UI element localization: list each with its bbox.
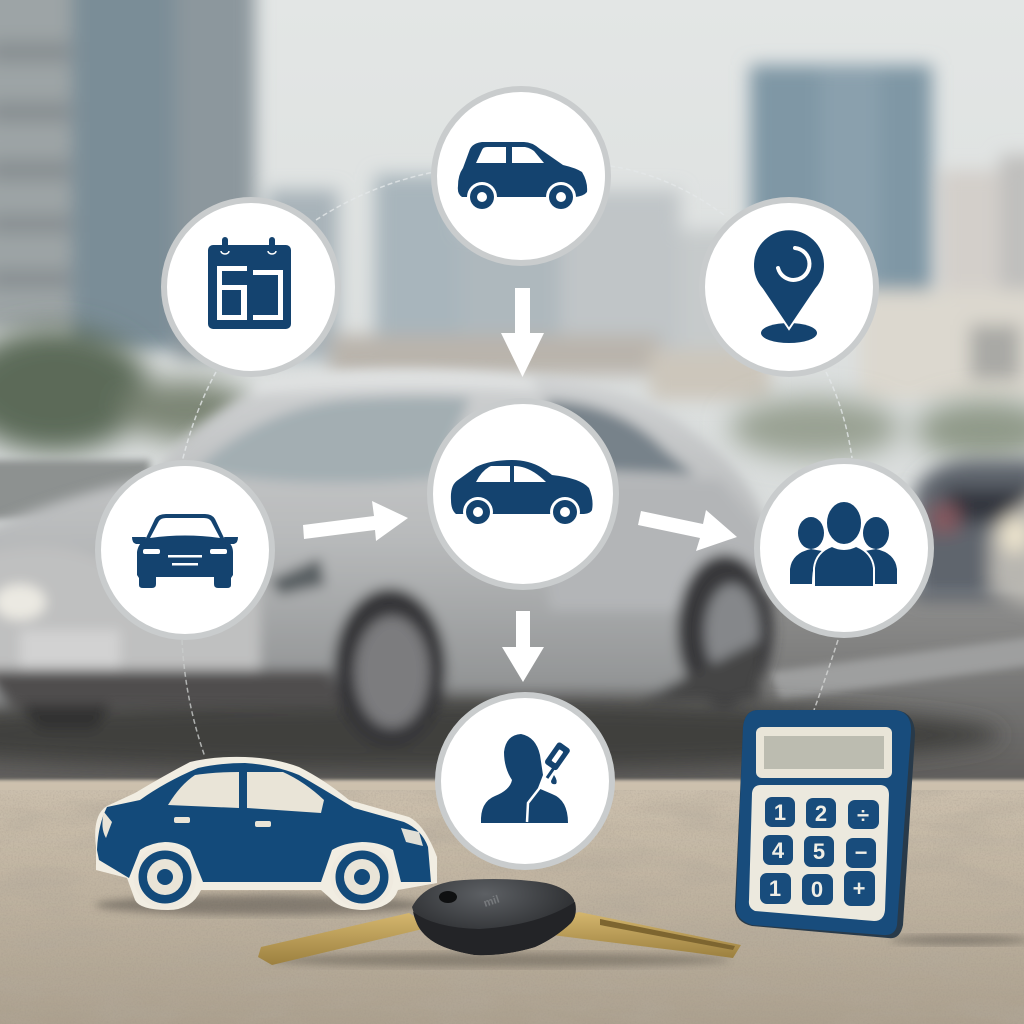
arrow: centre to people	[638, 510, 737, 551]
calculator keys: −	[855, 840, 867, 865]
icon: sedan	[451, 460, 593, 527]
calculator keys: 1	[769, 876, 781, 901]
car key: mil	[482, 894, 501, 910]
key blade left	[258, 913, 431, 965]
arrow: centre to seatbelt	[502, 611, 544, 682]
icon circle: location pin	[702, 200, 876, 374]
icon circle: top car	[434, 89, 608, 263]
arrow: top car to centre	[501, 288, 544, 377]
key blade right	[546, 912, 741, 958]
calculator	[735, 710, 1024, 945]
icon: person with seatbelt	[481, 734, 571, 823]
calculator keys: 1	[774, 800, 786, 825]
icon: group of people	[790, 501, 897, 587]
car cutout sticker	[95, 757, 437, 915]
arrow: left car to centre	[303, 501, 408, 541]
key fob	[412, 879, 575, 955]
icon: car front	[132, 514, 238, 588]
icon circle: seatbelt driver	[438, 695, 612, 867]
calculator keys: 4	[772, 838, 785, 863]
icon: calendar	[208, 237, 291, 329]
icon circle: centre sedan	[430, 401, 616, 587]
icon circle: calendar	[164, 200, 338, 374]
icon circle: front view car	[98, 463, 272, 637]
calculator keys: +	[853, 876, 865, 901]
car key	[258, 879, 741, 967]
calculator keys	[760, 797, 879, 906]
calculator keys: ÷	[857, 803, 869, 828]
connector lines: dashed arcs between circles	[182, 166, 852, 757]
blurred silver car	[0, 369, 1000, 771]
calculator keys: 2	[815, 801, 827, 826]
icon circle: people	[757, 461, 931, 635]
icon: hatchback car	[458, 142, 587, 212]
icon: location pin	[753, 229, 825, 343]
calculator keys: 0	[811, 877, 823, 902]
concrete ground	[0, 780, 1024, 1024]
calculator keys: 5	[813, 839, 825, 864]
background: road and far cars	[0, 460, 1024, 785]
